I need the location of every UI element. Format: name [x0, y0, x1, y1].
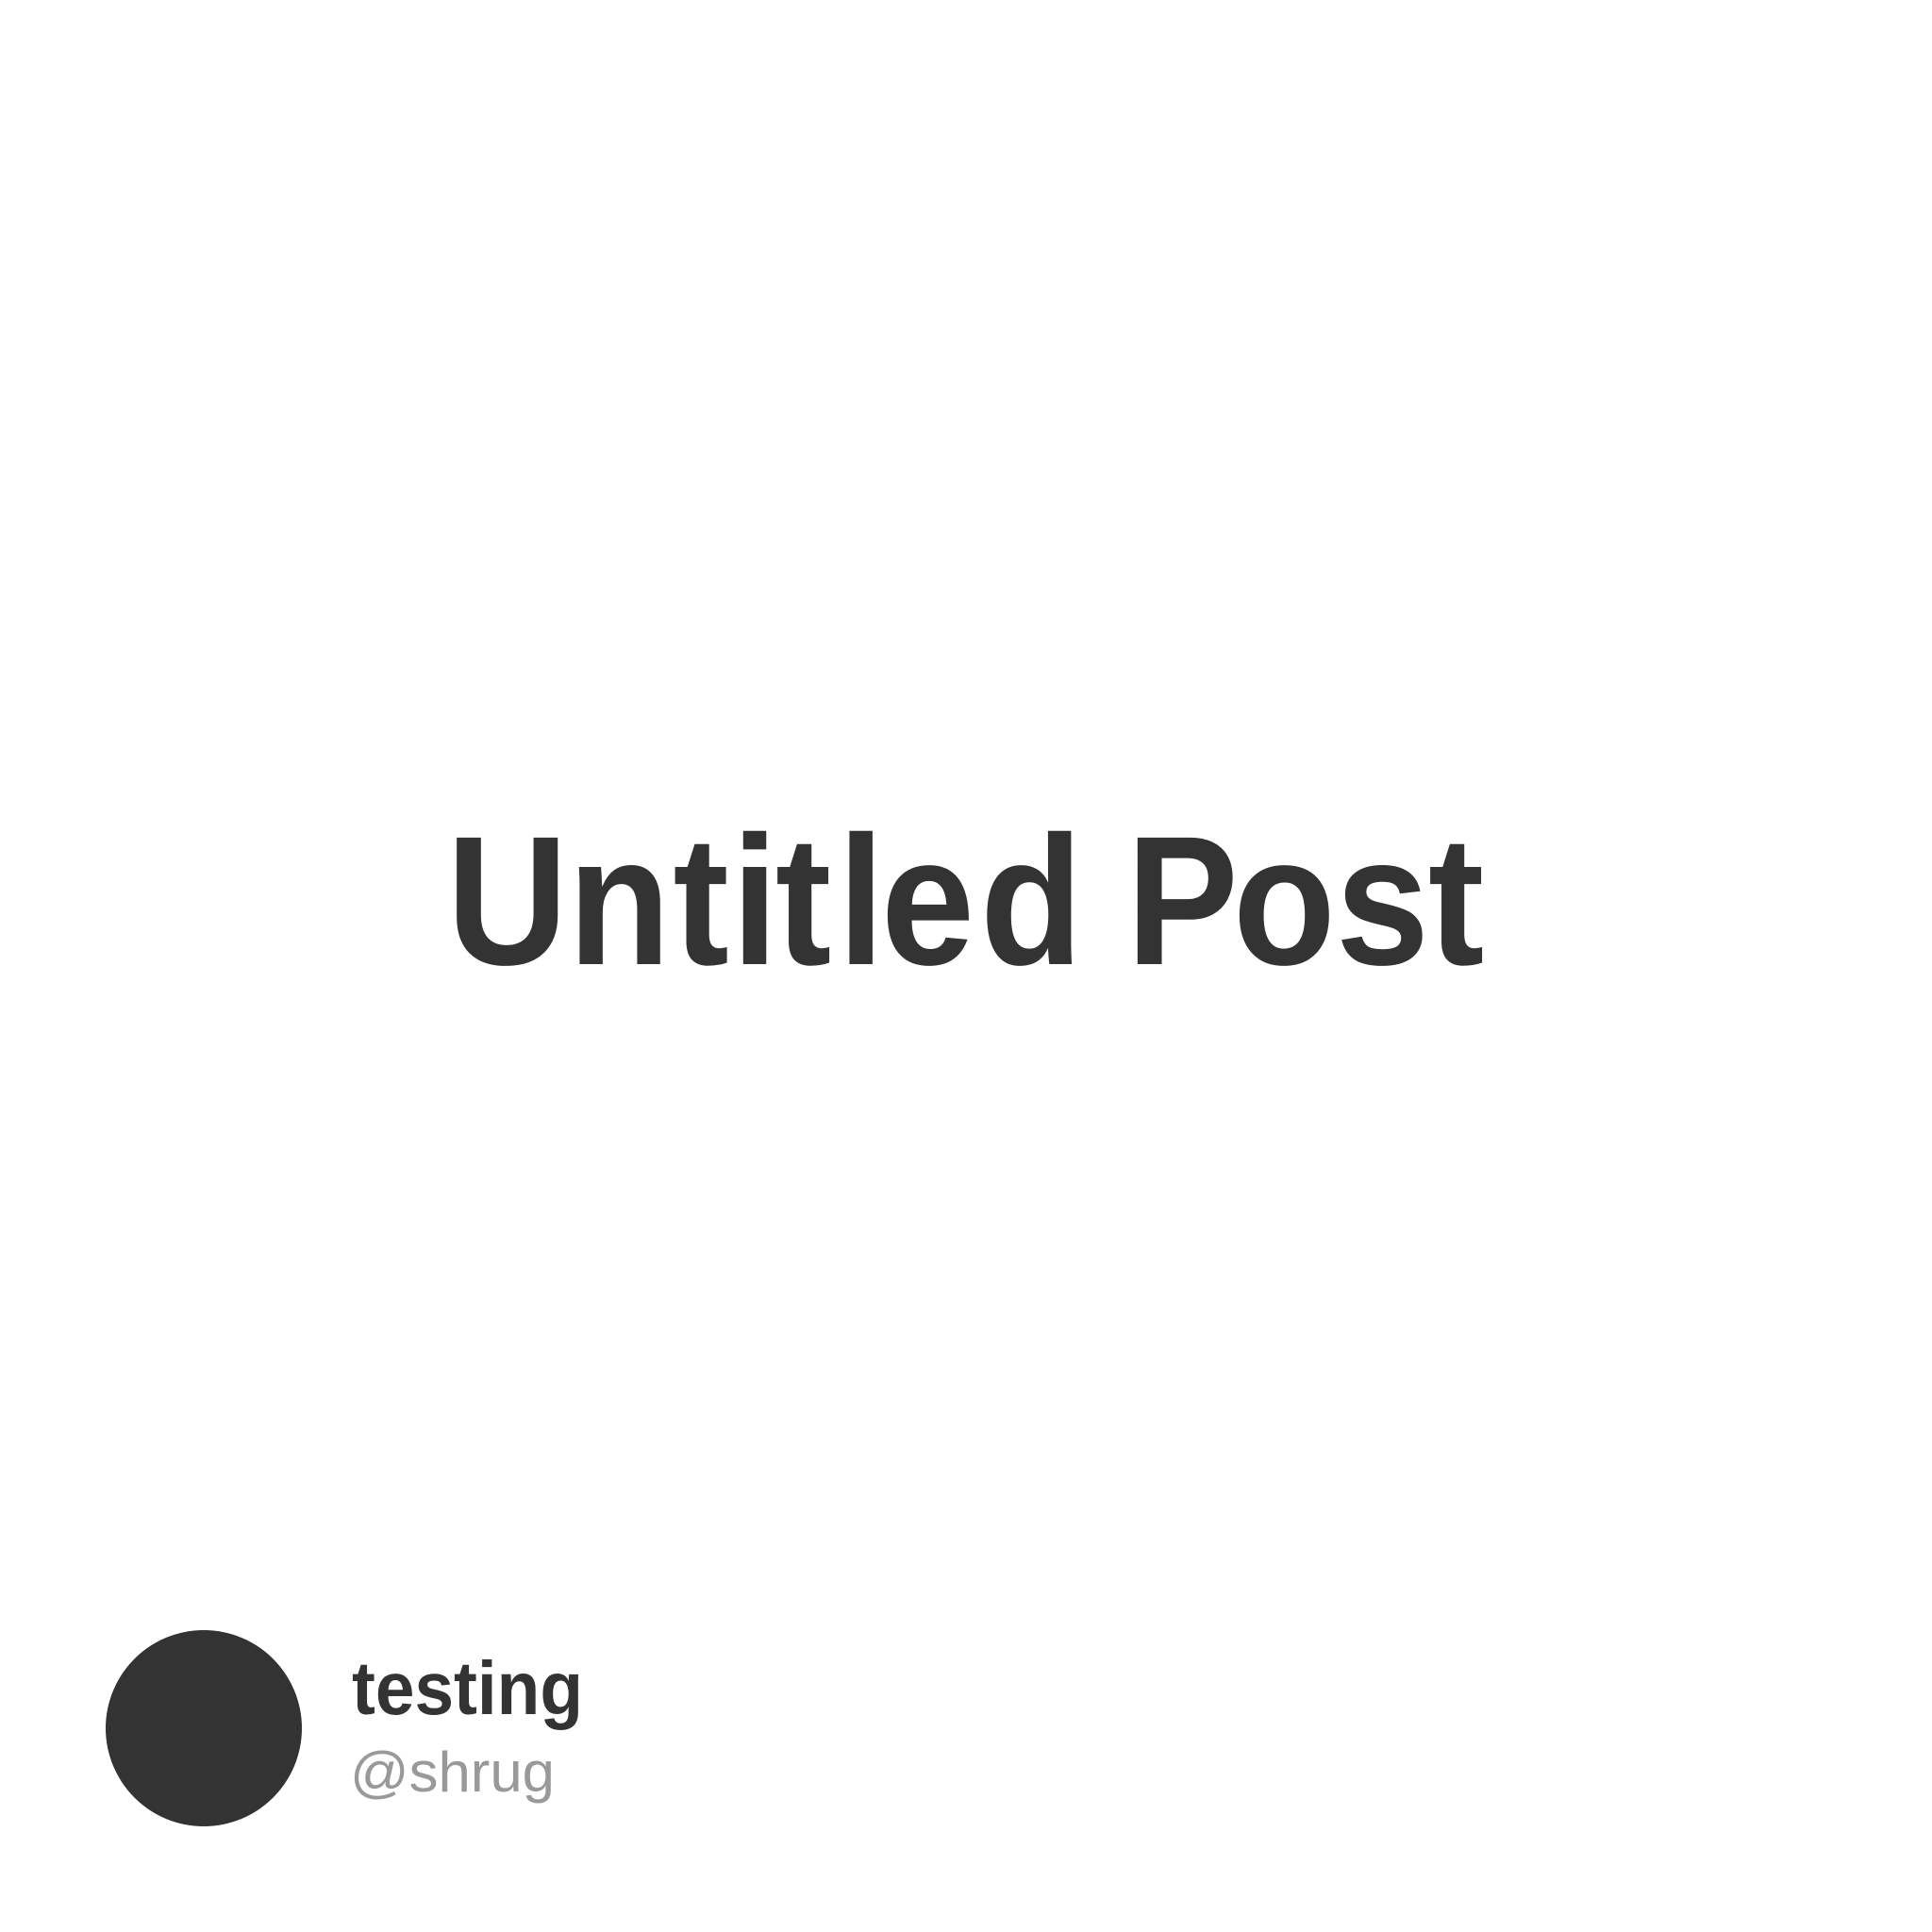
author name: testing — [352, 1646, 583, 1730]
author handle: @shrug — [350, 1740, 555, 1804]
title: Untitled Post — [446, 798, 1484, 1004]
avatar circle — [106, 1630, 302, 1826]
